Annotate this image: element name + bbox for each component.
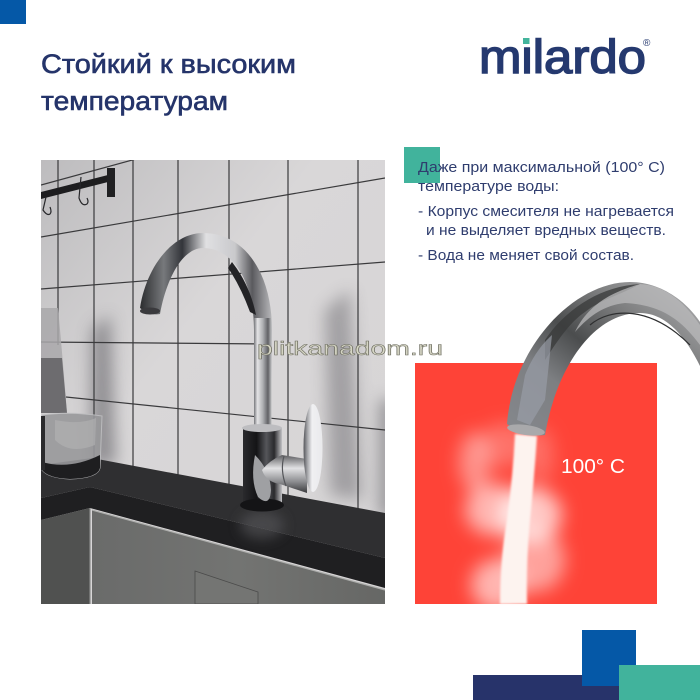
sink [41,508,385,604]
corner square top left [0,0,26,24]
description text: Даже при максимальной (100° С) [418,159,665,176]
faucet handle [262,404,322,493]
title: температурам [41,86,228,116]
logo: milardo: milardo [479,30,646,83]
description text: температуре воды: [418,178,559,195]
photo: kitchen faucet [41,159,395,604]
watermark: plitkanadom.ru [257,339,443,360]
corner blocks bottom right [473,630,700,700]
logo: milardo: ® [643,38,651,49]
description text: и не выделяет вредных веществ. [426,222,666,239]
faucet base [240,424,284,512]
description text [418,159,674,264]
green accent square [404,147,440,183]
faucet close-up [506,282,700,438]
title [41,49,296,116]
rail with hooks [41,168,115,214]
description text: - Корпус смесителя не нагревается [418,203,674,220]
title: Стойкий к высоким [41,49,296,79]
steam cloud [459,423,565,611]
label: 100 C: 100° C [561,456,625,478]
countertop [41,458,385,588]
vase and glass [41,308,102,479]
description text: - Вода не меняет свой состав. [418,247,634,264]
wall shadows [90,290,395,520]
panel: 100 degree water [415,363,657,611]
water stream [500,434,537,604]
faucet spout [140,233,272,428]
tile grid [41,159,385,515]
